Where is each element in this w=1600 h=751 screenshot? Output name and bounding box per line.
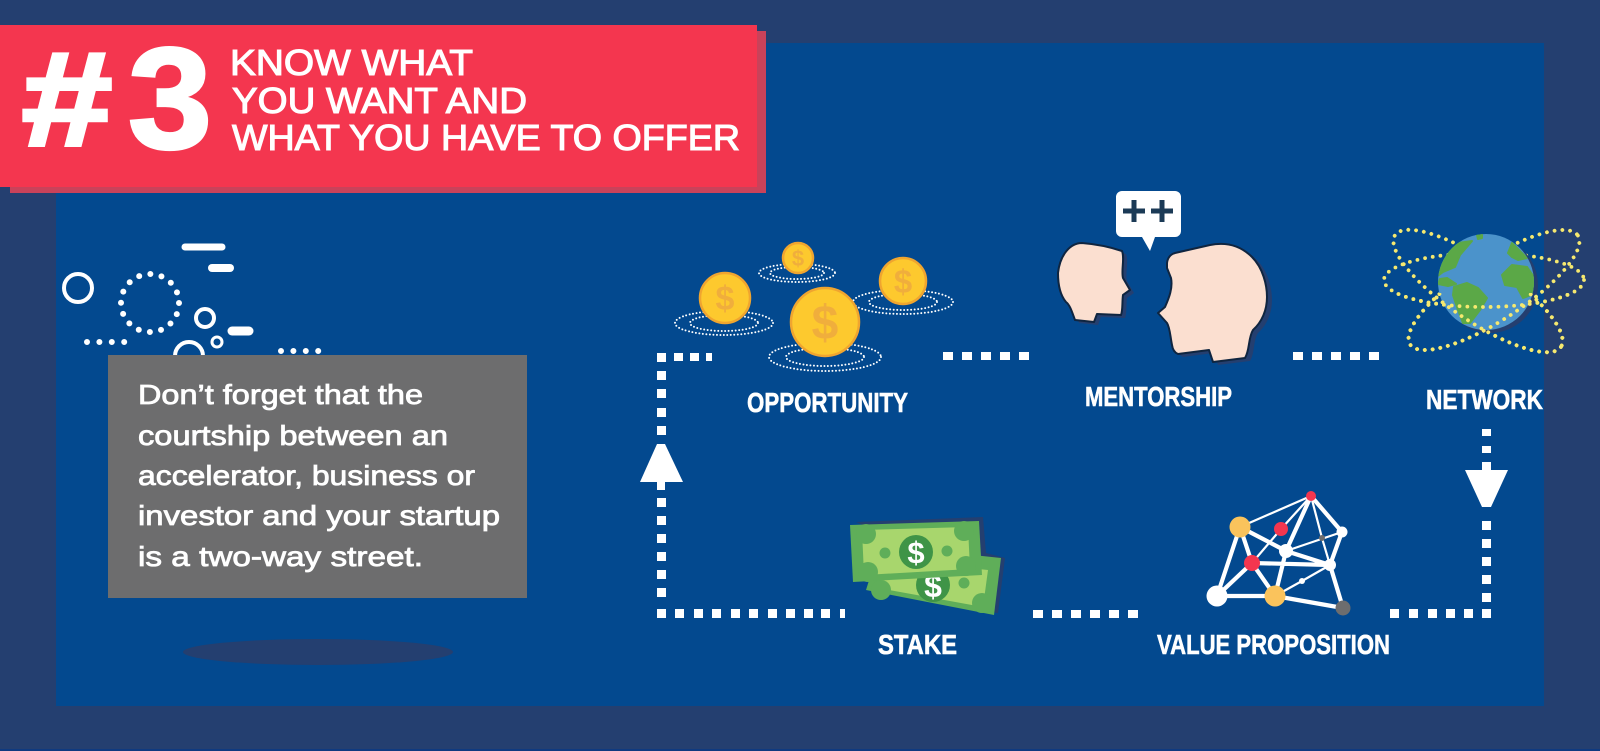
decorative circles and dashes	[64, 247, 319, 370]
icon: value network graph	[1206, 491, 1350, 616]
number heading: #	[22, 26, 112, 174]
text callout panel	[108, 355, 527, 598]
back orbits	[1378, 210, 1594, 372]
arrow up	[640, 444, 683, 490]
bottom edge strip	[0, 749, 1600, 751]
floating shadow ellipse	[183, 639, 453, 665]
icon: coins	[675, 243, 953, 371]
callout text	[138, 379, 500, 572]
front bill: $	[907, 535, 925, 570]
icon: coins: $	[716, 280, 735, 318]
graph nodes	[1206, 491, 1350, 616]
arrow down	[1465, 462, 1508, 507]
dotted connector loop	[657, 352, 1491, 618]
label: stake: STAKE	[878, 629, 957, 660]
globe	[1435, 234, 1538, 333]
title text: KNOW WHAT	[230, 42, 473, 83]
graph edges	[1217, 496, 1343, 608]
callout text: Don’t forget that the	[138, 379, 423, 410]
icon: globe with orbits	[1382, 228, 1586, 354]
left head	[1058, 243, 1134, 325]
callout text: courtship between an	[138, 420, 448, 451]
label: mentorship: MENTORSHIP	[1085, 381, 1232, 412]
right head	[1158, 244, 1272, 365]
callout text: is a two-way street.	[138, 541, 423, 572]
icon: coins: $	[894, 263, 912, 300]
title text	[230, 42, 740, 158]
icon: banknotes	[850, 517, 1005, 615]
callout text: accelerator, business or	[138, 460, 475, 491]
bills shadow	[856, 517, 1005, 613]
title banner	[0, 18, 766, 193]
banner back layer	[10, 31, 766, 193]
speech bubble	[1116, 191, 1181, 251]
front orbits	[1396, 293, 1576, 354]
label: network: NETWORK	[1426, 384, 1543, 415]
icon: coins: $	[812, 297, 839, 350]
callout text: investor and your startup	[138, 500, 500, 531]
back bill	[866, 545, 1001, 615]
title text: WHAT YOU HAVE TO OFFER	[232, 117, 740, 158]
front bill	[850, 521, 982, 582]
number heading: 3	[128, 18, 212, 179]
icon: two heads with speech bubble	[1058, 191, 1272, 365]
banner front layer	[0, 25, 757, 187]
label: opportunity: OPPORTUNITY	[747, 387, 908, 418]
back bill: $	[924, 568, 942, 604]
number heading	[22, 18, 212, 179]
icon: coins: $	[792, 246, 804, 271]
label: value proposition: VALUE PROPOSITION	[1157, 629, 1390, 660]
title text: YOU WANT AND	[232, 80, 527, 121]
callout box	[108, 355, 527, 598]
